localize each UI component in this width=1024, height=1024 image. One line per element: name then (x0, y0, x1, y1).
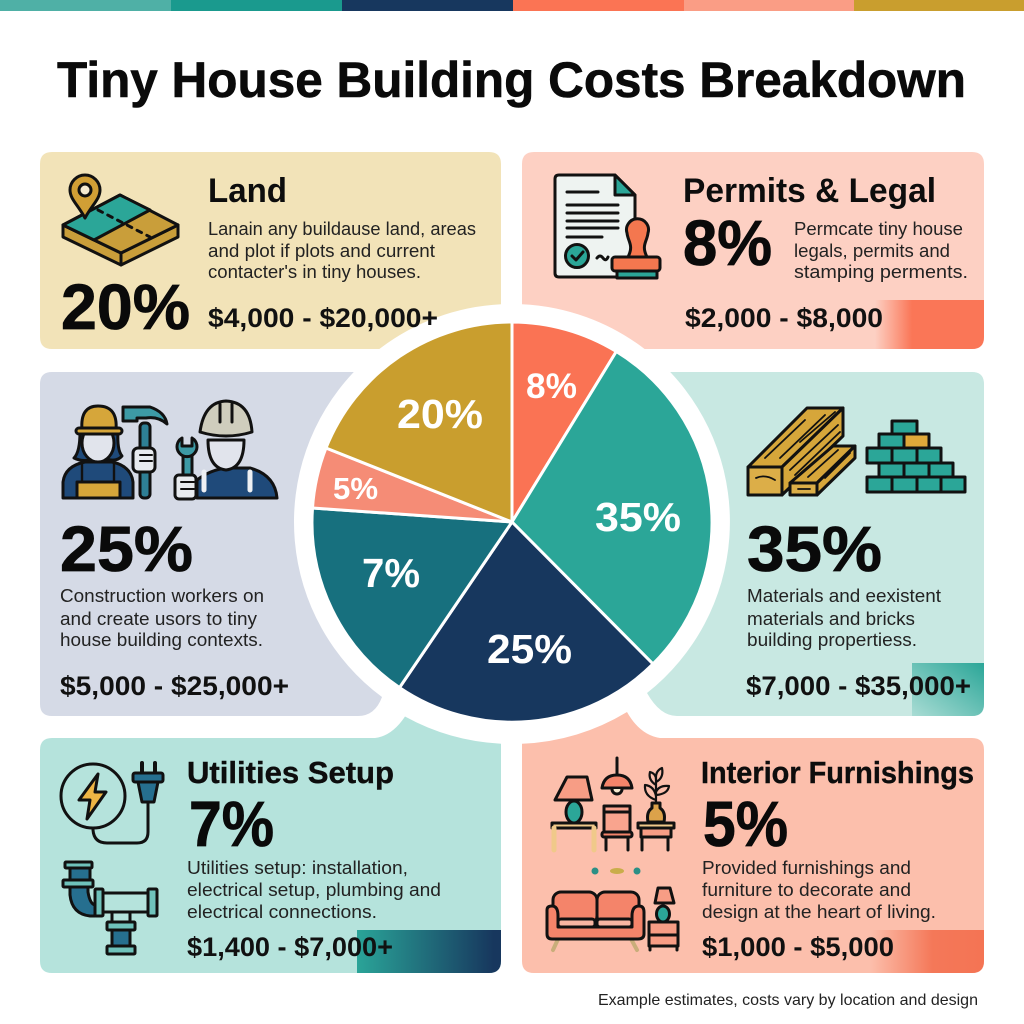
cost range: labor: $5,000 - $25,000+ (60, 671, 289, 701)
accent gradient: permits (875, 300, 984, 349)
icon: brick pile (867, 421, 965, 492)
description: permits (794, 218, 968, 282)
panel: labor (40, 372, 382, 716)
accent gradient: utilities (357, 930, 501, 973)
description: materials: Materials and eexistent (747, 585, 941, 606)
percentage: interior: 5% (703, 788, 788, 860)
cost range: land: $4,000 - $20,000+ (208, 303, 438, 333)
description: utilities (187, 857, 441, 922)
pie chart (312, 322, 712, 722)
description: labor: house building contexts. (60, 629, 263, 650)
description: utilities: electrical connections. (187, 901, 377, 922)
icon: water pipes (63, 862, 157, 954)
icon: power plug and lightning bolt (61, 763, 163, 843)
heading: land: Land (208, 172, 287, 210)
pie label: 35%: 35% (595, 494, 681, 540)
description: land: and plot if plots and current (208, 240, 435, 261)
cost range: utilities: $1,400 - $7,000+ (187, 932, 393, 962)
description: permits: legals, permits and (794, 240, 950, 261)
description: land: contacter's in tiny houses. (208, 261, 421, 282)
description: utilities: Utilities setup: installation, (187, 857, 408, 878)
panel: permits and legal (522, 152, 984, 349)
percentage: utilities: 7% (189, 788, 274, 860)
accent gradient: interior (870, 930, 984, 973)
top colour bar (0, 0, 1024, 11)
description: land: Lanain any buildause land, areas (208, 218, 476, 239)
percentage: labor: 25% (60, 513, 193, 585)
pie label: 20%: 20% (397, 391, 483, 437)
panel: materials (647, 372, 984, 716)
description: interior: furniture to decorate and (702, 879, 911, 900)
description: permits: Permcate tiny house (794, 218, 963, 239)
description: interior: Provided furnishings and (702, 857, 911, 878)
icon: timber beams (748, 408, 855, 495)
description: labor: and create usors to tiny (60, 608, 258, 629)
description: materials: building propertiess. (747, 629, 917, 650)
percentage: permits: 8% (683, 207, 772, 279)
description: labor: Construction workers on (60, 585, 264, 606)
icon: document with stamp (555, 175, 660, 278)
pie label: 25%: 25% (487, 626, 572, 672)
icon: sofa and bedside lamp (547, 888, 678, 950)
pie label: 7%: 7% (362, 550, 420, 596)
footnote: Example estimates, costs vary by location and design (598, 992, 978, 1009)
panel: utilities (40, 716, 501, 973)
description: utilities: electrical setup, plumbing and (187, 879, 441, 900)
title: Tiny House Building Costs Breakdown (57, 52, 966, 108)
cost range: materials: $7,000 - $35,000+ (746, 671, 971, 701)
icon: construction workers with tools (63, 401, 277, 499)
heading: interior: Interior Furnishings (701, 755, 974, 790)
pie label: 5%: 5% (333, 471, 378, 506)
icon: land plot with map pin (63, 175, 178, 265)
icon: decorative dots (592, 868, 640, 874)
pie label: 8%: 8% (526, 367, 577, 406)
description: materials: materials and bricks (747, 608, 915, 629)
description: land (208, 218, 476, 282)
cost range: interior: $1,000 - $5,000 (702, 932, 894, 962)
description: labor (60, 585, 264, 650)
cost range: permits: $2,000 - $8,000 (685, 303, 883, 333)
panel: land (40, 152, 501, 349)
heading: permits: Permits & Legal (683, 172, 936, 210)
accent gradient: materials (912, 663, 984, 716)
description: materials (747, 585, 941, 650)
percentage: materials: 35% (747, 513, 882, 585)
description: interior (702, 857, 936, 922)
percentage: land: 20% (61, 271, 190, 343)
description: permits: stamping perments. (794, 261, 968, 282)
heading: utilities: Utilities Setup (187, 755, 394, 790)
panel: interior furnishings (522, 712, 984, 973)
icon: table lamp, pendant, chair and plant (552, 758, 674, 850)
description: interior: design at the heart of living. (702, 901, 936, 922)
